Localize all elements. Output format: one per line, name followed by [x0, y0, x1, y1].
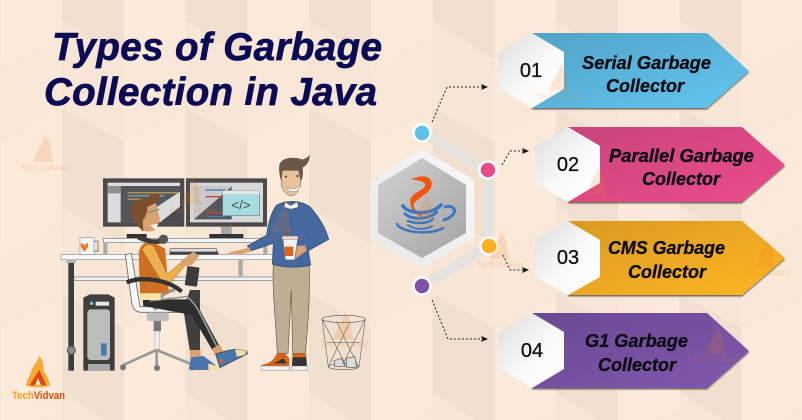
timeline node: pink — [480, 162, 496, 178]
connector track — [422, 133, 489, 286]
computer tower — [83, 294, 115, 371]
office chair — [120, 253, 195, 371]
banner 04: G1 Garbage Collector — [499, 313, 749, 388]
wastebasket — [322, 315, 365, 370]
title — [44, 26, 382, 114]
watermarks: TechVidvan — [321, 339, 367, 349]
monitors — [103, 178, 267, 238]
banner 02: Parallel Garbage Collector: Parallel Garbage — [609, 145, 754, 166]
watermarks: TechVidvan — [402, 221, 448, 231]
watermarks: TechVidvan — [259, 232, 305, 242]
watermarks: TechVidvan — [574, 195, 620, 205]
banner 02: Parallel Garbage Collector: Collector — [642, 168, 722, 189]
banner 03: CMS Garbage Collector — [535, 221, 785, 295]
seated developer — [127, 193, 247, 370]
banner 03: CMS Garbage Collector: CMS Garbage — [608, 237, 725, 258]
watermarks: TechVidvan — [537, 91, 583, 101]
desk — [61, 238, 274, 371]
title: Types of Garbage — [52, 26, 382, 69]
watermarks: TechVidvan — [743, 267, 789, 277]
watermarks: TechVidvan — [693, 354, 739, 364]
timeline node: blue — [414, 124, 430, 142]
banner 04: G1 Garbage Collector: G1 Garbage — [585, 330, 688, 351]
watermarks — [21, 64, 789, 364]
banner 03: CMS Garbage Collector: Collector — [628, 261, 708, 282]
timeline node: yellow — [480, 238, 498, 254]
timeline node: purple — [414, 278, 430, 294]
arrow: node 1 — [432, 87, 487, 122]
standing developer — [227, 154, 329, 371]
central hexagon with Java logo — [370, 149, 474, 268]
banner 04: G1 Garbage Collector: Collector — [598, 354, 678, 375]
watermarks: TechVidvan — [169, 205, 215, 215]
title: Collection in Java — [44, 71, 377, 114]
monitors: </> — [231, 197, 251, 212]
banner 01: Serial Garbage Collector — [499, 33, 749, 108]
banner 04: G1 Garbage Collector: 04 — [521, 340, 543, 362]
illustration: developers at desk — [61, 154, 365, 371]
banner 01: Serial Garbage Collector: 01 — [520, 60, 542, 82]
arrow: node 3 — [503, 255, 528, 270]
arrow: node 4 — [432, 300, 487, 339]
watermarks: TechVidvan — [477, 259, 523, 269]
banner 02: Parallel Garbage Collector: 02 — [557, 154, 579, 176]
banner 01: Serial Garbage Collector: Collector — [606, 75, 686, 96]
banner 02: Parallel Garbage Collector — [535, 127, 785, 202]
logo: TechVidvan: TechVidvan — [12, 390, 65, 402]
watermarks: TechVidvan — [21, 162, 67, 172]
banner 03: CMS Garbage Collector: 03 — [557, 247, 579, 269]
icon: java cup — [397, 177, 454, 232]
logo: TechVidvan — [12, 356, 65, 402]
mug — [80, 238, 98, 254]
banner 01: Serial Garbage Collector: Serial Garbage — [582, 52, 711, 73]
arrow: node 2 — [502, 151, 528, 165]
